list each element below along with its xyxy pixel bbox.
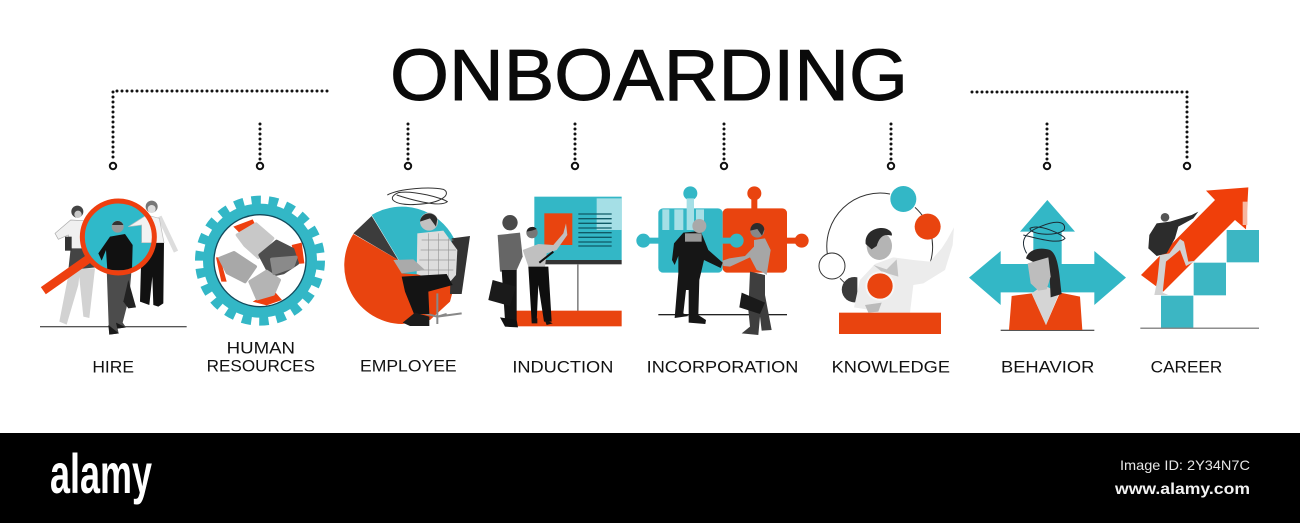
website: www.alamy.com (1114, 481, 1250, 498)
title: ONBOARDING (390, 36, 908, 116)
panel: hire (40, 201, 187, 377)
panel: incorporation (636, 186, 809, 376)
panel: knowledge (819, 186, 954, 376)
connector: dotted timeline to step markers (110, 91, 1190, 169)
panel: human resources (200, 201, 320, 376)
footer logo: alamy (50, 442, 152, 505)
panel: human resources: HUMAN (227, 338, 295, 357)
panel: induction (488, 197, 622, 376)
panel: behavior (969, 200, 1126, 376)
panel: human resources: RESOURCES (207, 357, 315, 376)
footer bar (0, 433, 1300, 523)
panel: induction: INDUCTION (512, 357, 613, 376)
panel: behavior: BEHAVIOR (1001, 357, 1094, 376)
panel: employee: EMPLOYEE (360, 357, 457, 376)
panel: incorporation: INCORPORATION (647, 357, 798, 376)
image id: Image ID: 2Y34N7C (1120, 457, 1250, 473)
panel: employee (344, 188, 470, 376)
panel: hire: HIRE (92, 358, 134, 377)
panel: career (1140, 187, 1259, 376)
panel: career: CAREER (1151, 357, 1222, 376)
panel: knowledge: KNOWLEDGE (832, 357, 950, 376)
